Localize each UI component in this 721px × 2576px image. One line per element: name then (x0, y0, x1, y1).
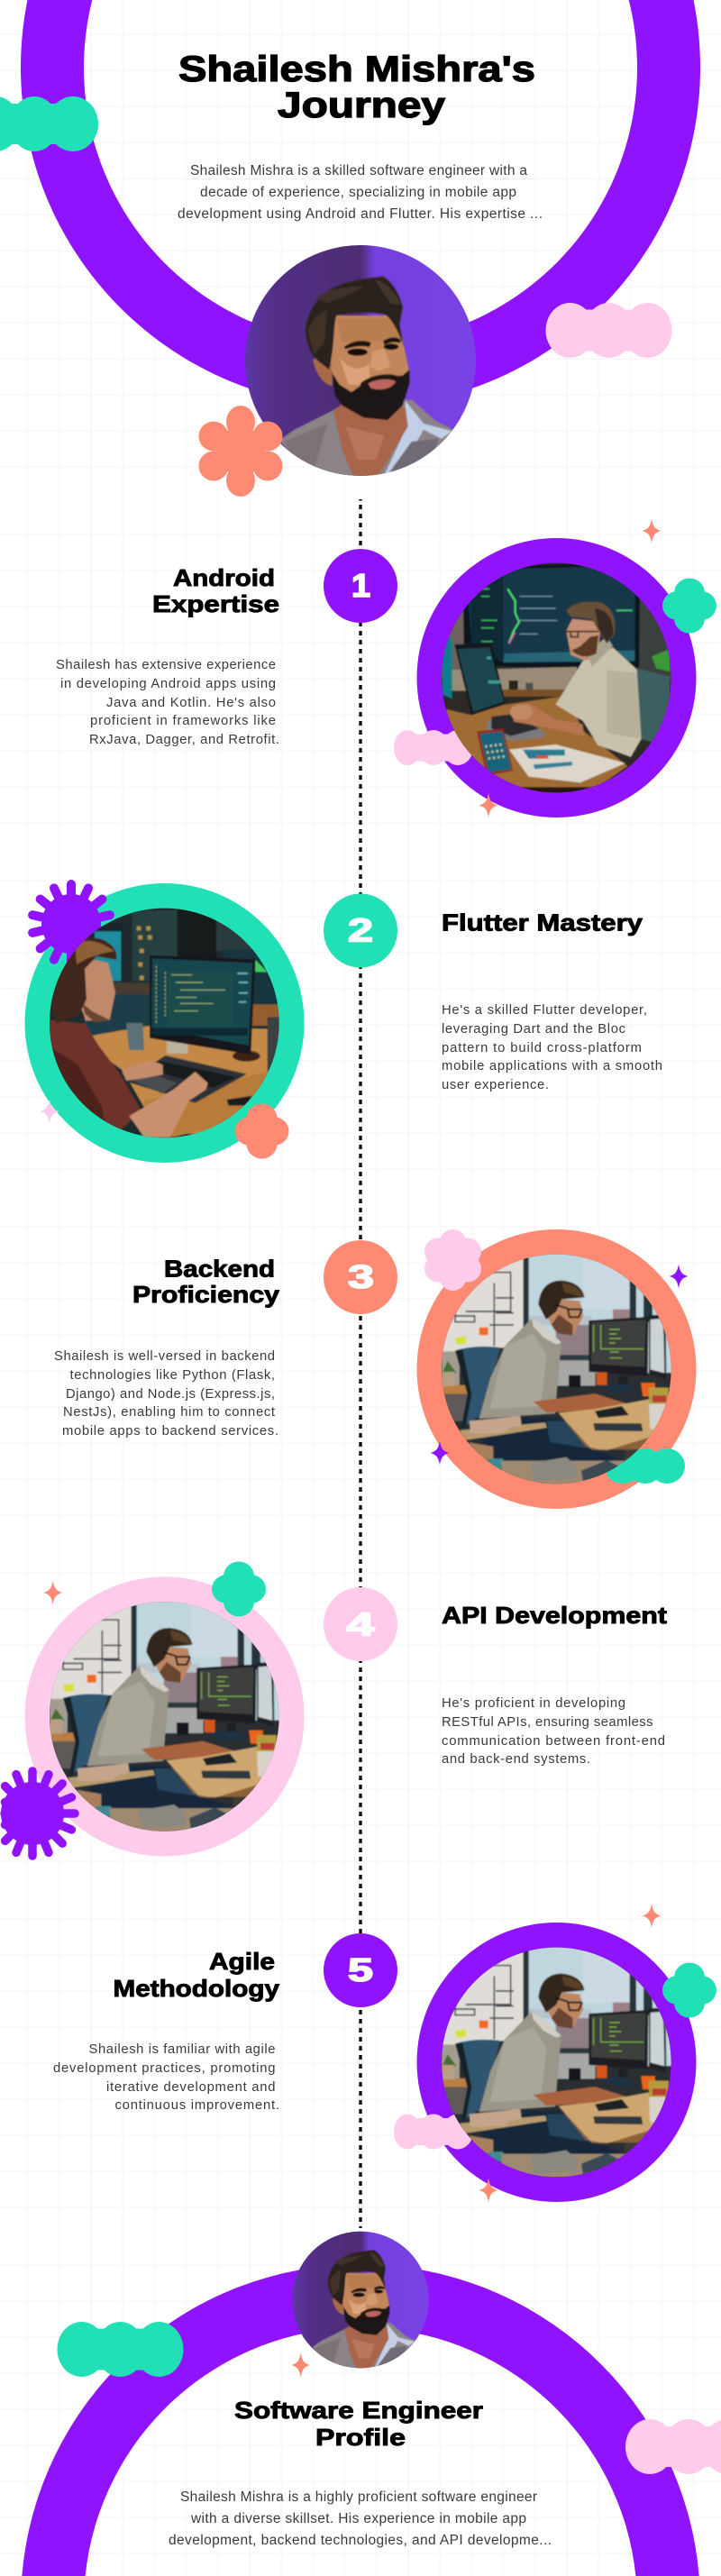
panel: step 1 Android Expertise (56, 519, 716, 818)
body text: communication between front-end (442, 1734, 665, 1749)
number badge 5: 5 (348, 1951, 373, 1988)
sparkle (291, 2352, 310, 2378)
ring with photo (25, 883, 305, 1163)
portrait photo (243, 243, 478, 480)
number badge 3: 3 (348, 1258, 374, 1295)
title: Journey (278, 86, 446, 125)
body text: user experience. (442, 1078, 549, 1092)
heading: Android (173, 564, 275, 591)
ring with photo (394, 1904, 716, 2203)
body text: NestJs), enabling him to connect (63, 1405, 275, 1420)
panel: footer profile (22, 2230, 721, 2576)
number badge 2 (324, 894, 397, 968)
heading: Expertise (152, 590, 279, 617)
header purple ring (21, 0, 700, 407)
heading: API Development (442, 1602, 667, 1629)
body text: Shailesh has extensive experience (56, 658, 276, 672)
heading (114, 1948, 280, 2002)
footer heading: Software Engineer (234, 2397, 483, 2424)
body text: leveraging Dart and the Bloc (442, 1022, 626, 1037)
heading: Backend (164, 1255, 275, 1282)
body text (442, 1696, 665, 1767)
footer portrait (291, 2230, 430, 2371)
body text: and back-end systems. (442, 1752, 590, 1767)
body text: RxJava, Dagger, and Retrofit. (89, 733, 279, 747)
teal cloud (0, 96, 98, 151)
body text (53, 2042, 279, 2113)
pink cloud (625, 2419, 721, 2474)
body text: proficient in frameworks like (90, 714, 276, 728)
footer text (169, 2489, 552, 2548)
heading: Flutter Mastery (442, 909, 643, 936)
body text: development practices, promoting (53, 2061, 276, 2076)
number badge 3 (324, 1240, 397, 1314)
body text: in developing Android apps using (60, 677, 276, 691)
heading: Methodology (114, 1975, 280, 2002)
heading (132, 1255, 280, 1308)
body text (56, 658, 279, 747)
panel: step 3 Backend Proficiency (54, 1229, 696, 1509)
body text: Shailesh is well-versed in backend (54, 1349, 275, 1364)
body text: Shailesh is familiar with agile (88, 2042, 276, 2057)
timeline dotted line (359, 499, 362, 2228)
panel: step 4 API Development (1, 1561, 667, 1857)
body text: He's a skilled Flutter developer, (442, 1003, 647, 1018)
body text: mobile apps to backend services. (62, 1424, 278, 1439)
panel: step 2 Flutter Mastery (25, 883, 662, 1163)
teal cloud (58, 2322, 184, 2377)
body text (54, 1349, 278, 1439)
title (178, 50, 535, 125)
ring with photo (394, 519, 716, 818)
number badge 4: 4 (346, 1606, 375, 1642)
number badge 1 (324, 549, 397, 623)
title: Shailesh Mishra's (178, 50, 535, 89)
intro text (178, 163, 543, 222)
salmon flower (198, 406, 283, 497)
intro text: decade of experience, specializing in mobile app (200, 185, 516, 200)
panel: step 5 Agile Methodology (53, 1904, 716, 2203)
number badge 4 (324, 1587, 397, 1661)
footer heading: Profile (315, 2424, 406, 2451)
number badge 1: 1 (351, 567, 370, 604)
body text: mobile applications with a smooth (442, 1059, 662, 1073)
footer purple ring (22, 2264, 699, 2576)
footer text: development, backend technologies, and API developme... (169, 2533, 552, 2548)
heading: Agile (209, 1948, 275, 1975)
pink cloud (546, 303, 672, 358)
body text: pattern to build cross-platform (442, 1041, 642, 1055)
intro text: development using Android and Flutter. His expertise ... (178, 206, 543, 222)
heading (152, 564, 279, 617)
ring with photo (416, 1229, 696, 1509)
heading: Proficiency (132, 1281, 280, 1308)
footer text: with a diverse skillset. His experience in mobile app (190, 2511, 526, 2526)
intro text: Shailesh Mishra is a skilled software engineer with a (190, 163, 527, 178)
ring with photo (1, 1561, 305, 1857)
number badge 5 (324, 1933, 397, 2007)
body text: iterative development and (106, 2080, 276, 2095)
body text: continuous improvement. (115, 2098, 279, 2113)
number badge 2: 2 (348, 912, 373, 948)
panel: header (0, 0, 700, 497)
footer text: Shailesh Mishra is a highly proficient software engineer (180, 2489, 537, 2505)
body text: Java and Kotlin. He's also (106, 696, 276, 710)
body text (442, 1003, 662, 1092)
body text: RESTful APIs, ensuring seamless (442, 1715, 653, 1730)
body text: Django) and Node.js (Express.js, (66, 1387, 275, 1402)
footer heading (234, 2397, 483, 2451)
body text: He's proficient in developing (442, 1696, 625, 1711)
body text: technologies like Python (Flask, (70, 1368, 275, 1383)
